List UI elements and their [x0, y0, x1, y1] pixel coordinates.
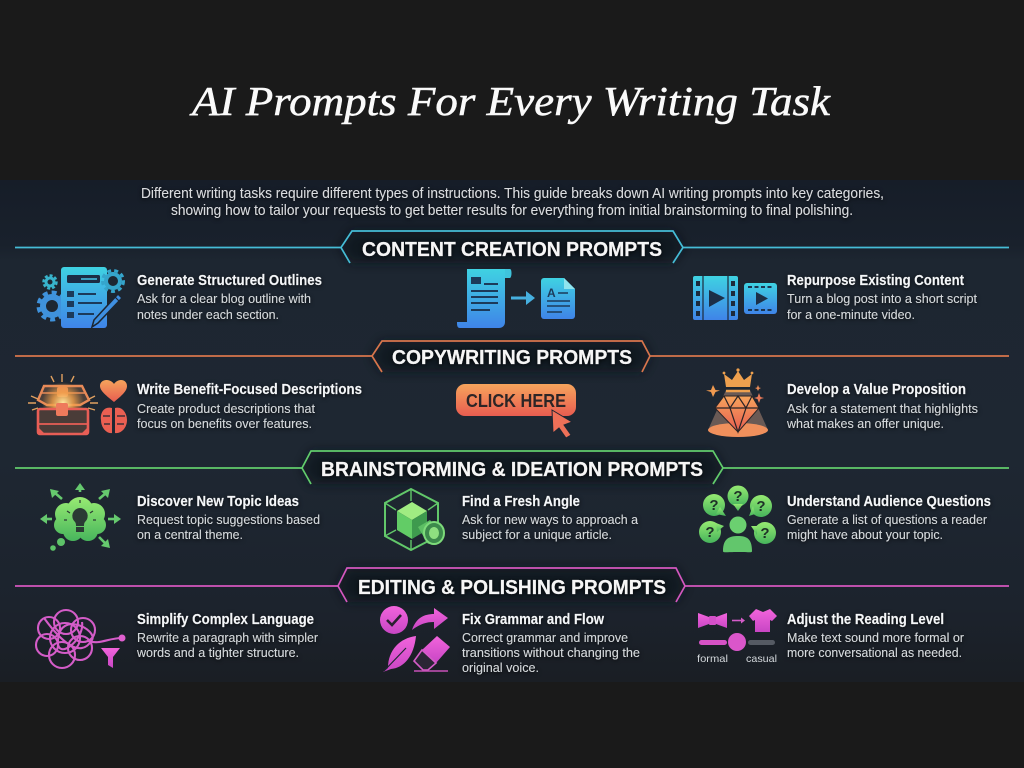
icon: tangled line, funnel — [36, 610, 126, 668]
icon: bow tie, shirt and formality slider — [697, 609, 777, 665]
icon: person with question bubbles — [699, 486, 776, 552]
item heading: Develop a Value Proposition — [787, 382, 966, 398]
icon: wireframe cube with camera lens — [385, 489, 444, 550]
item description: Ask for a clear blog outline with — [137, 291, 311, 306]
item description — [786, 401, 978, 431]
item: generate structured outlines — [38, 267, 322, 328]
icon: bow tie, shirt and formality slider: casual — [746, 653, 777, 665]
section header: brainstorming and ideation: BRAINSTORMING & IDEATION PROMPTS — [321, 459, 703, 481]
section header: brainstorming and ideation — [15, 451, 1009, 484]
item: develop a value proposition — [706, 368, 978, 437]
icon: click here button with cursor: CLICK HERE — [466, 391, 566, 411]
section header: content creation — [15, 231, 1009, 263]
item description: might have about your topic. — [787, 527, 943, 542]
item description — [137, 512, 320, 542]
section header: copywriting: COPYWRITING PROMPTS — [392, 347, 632, 369]
item: fix grammar and flow — [380, 606, 640, 675]
icon: person with question bubbles: ? — [709, 497, 719, 514]
item description: Rewrite a paragraph with simpler — [137, 630, 319, 645]
item description: Correct grammar and improve — [462, 630, 628, 645]
item heading: Understand Audience Questions — [787, 494, 991, 510]
item heading: Discover New Topic Ideas — [137, 494, 299, 510]
item description: Generate a list of questions a reader — [787, 512, 988, 527]
item: write benefit-focused descriptions — [28, 374, 362, 434]
icon: film strips with play — [693, 276, 777, 320]
item: find a fresh angle — [385, 489, 639, 550]
item: adjust the reading level — [697, 609, 965, 665]
icon: bow tie, shirt and formality slider: formal — [697, 653, 728, 665]
section header: content creation: CONTENT CREATION PROMPTS — [362, 239, 662, 261]
item heading: Write Benefit-Focused Descriptions — [137, 382, 362, 398]
icon: person with question bubbles: ? — [756, 498, 766, 515]
item heading: Adjust the Reading Level — [787, 612, 944, 628]
panel: infographic body — [0, 180, 1024, 682]
item description — [136, 630, 319, 660]
icon: person with question bubbles: ? — [705, 524, 715, 541]
icon: scroll converted to formatted document — [457, 269, 575, 328]
icon: lightbulb cloud with arrows — [40, 483, 121, 551]
item description: notes under each section. — [137, 307, 279, 322]
item description: Ask for a statement that highlights — [787, 401, 978, 416]
item description — [787, 291, 977, 322]
item description — [137, 401, 315, 431]
item description — [787, 512, 988, 542]
item description: Turn a blog post into a short script — [787, 291, 977, 306]
item description: original voice. — [462, 660, 539, 675]
item heading: Find a Fresh Angle — [462, 494, 580, 510]
item description: Ask for new ways to approach a — [462, 512, 639, 527]
item heading: Repurpose Existing Content — [787, 273, 964, 289]
icon: outline document with gears and pencil — [38, 267, 124, 328]
item description: Request topic suggestions based — [137, 512, 320, 527]
icon: check mark, arrow, feather, eraser — [380, 606, 450, 672]
icon: scroll converted to formatted document: A — [547, 286, 556, 300]
item description: words and a tighter structure. — [136, 645, 299, 660]
item description — [137, 291, 311, 322]
item description — [787, 630, 965, 660]
item: simplify complex language — [36, 610, 319, 668]
title: AI Prompts For Every Writing Task — [189, 78, 831, 124]
item: understand audience questions — [699, 486, 991, 552]
icon: person with question bubbles: ? — [760, 525, 770, 542]
section header: copywriting — [15, 341, 1009, 372]
item description: subject for a unique article. — [462, 527, 612, 542]
intro text: Different writing tasks require different types of instructions. This guide breaks down AI writing prompts into key categories, — [141, 186, 884, 202]
item description: more conversational as needed. — [787, 645, 962, 660]
intro text: showing how to tailor your requests to get better results for everything from initial brainstorming to final polishing. — [171, 203, 853, 219]
icon: treasure chest, heart and brain — [28, 374, 127, 434]
item description: for a one-minute video. — [787, 307, 915, 322]
section header: editing and polishing — [15, 568, 1009, 602]
item description: transitions without changing the — [462, 645, 640, 660]
item description: Create product descriptions that — [137, 401, 315, 416]
item description: on a central theme. — [137, 527, 243, 542]
item description: what makes an offer unique. — [786, 416, 944, 431]
item description — [462, 512, 639, 542]
item: discover new topic ideas — [40, 483, 320, 551]
item description: focus on benefits over features. — [137, 416, 312, 431]
icon: click here button with cursor — [456, 384, 576, 438]
item heading: Simplify Complex Language — [137, 612, 314, 628]
item description: Make text sound more formal or — [787, 630, 965, 645]
icon: diamond with crown — [706, 368, 768, 437]
item: repurpose existing content — [693, 273, 977, 322]
icon: person with question bubbles: ? — [733, 488, 743, 505]
intro text — [141, 186, 884, 219]
item heading: Fix Grammar and Flow — [462, 612, 605, 628]
item description — [462, 630, 640, 675]
item heading: Generate Structured Outlines — [137, 273, 322, 289]
section header: editing and polishing: EDITING & POLISHING PROMPTS — [358, 577, 666, 599]
